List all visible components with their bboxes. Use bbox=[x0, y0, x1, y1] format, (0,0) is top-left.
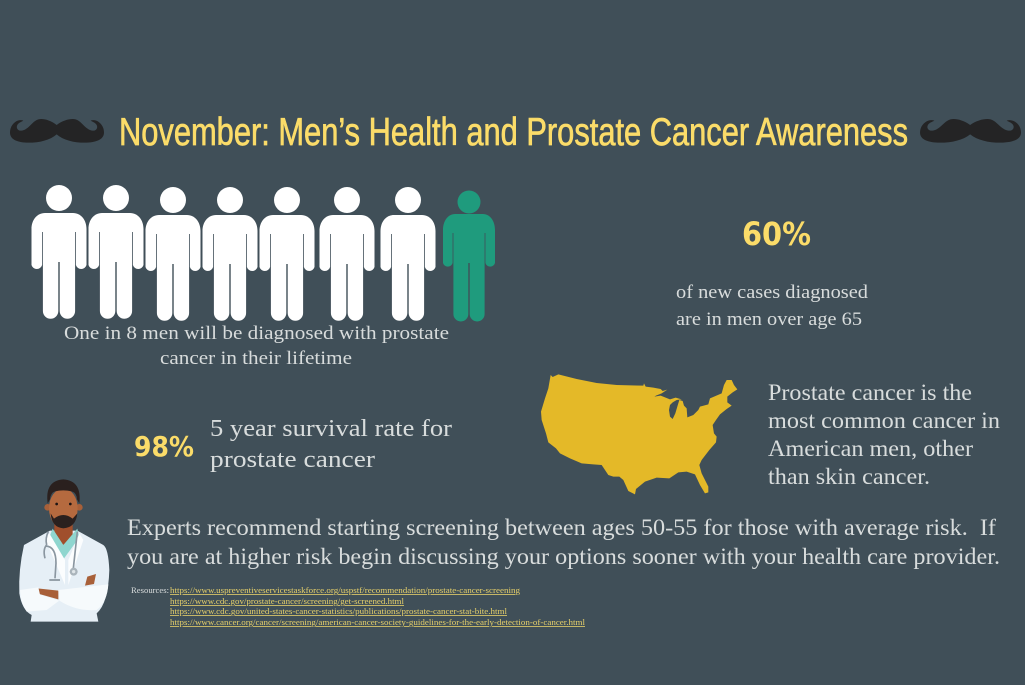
icon: USA map bbox=[541, 374, 737, 494]
text: resources: https://www.cancer.org/cancer/screening/american-cancer-society-guidelines-for-the-early-detection-of-cancer.html bbox=[170, 618, 586, 627]
text: screening recommendation: Experts recommend starting screening between ages 50-55 for those with average risk. If bbox=[127, 515, 996, 540]
text: one in eight caption bbox=[64, 323, 449, 369]
text: survival rate bbox=[210, 416, 452, 473]
text: most common cancer: American men, other bbox=[768, 436, 973, 461]
text: survival rate: 5 year survival rate for bbox=[210, 416, 452, 442]
text: new cases caption bbox=[676, 282, 869, 330]
text: most common cancer: most common cancer in bbox=[768, 408, 1001, 433]
text: one in eight caption: cancer in their lifetime bbox=[160, 348, 352, 369]
stat: 98%: 98% bbox=[134, 430, 194, 463]
text: resources: https://www.cdc.gov/united-states-cancer-statistics/publications/prostate-cancer-stat-bite.html bbox=[170, 607, 508, 616]
icon: person 1 bbox=[32, 185, 86, 319]
text: new cases caption: are in men over age 65 bbox=[676, 309, 862, 330]
icon: person 2 bbox=[88, 185, 144, 319]
icon: left moustache bbox=[10, 119, 104, 143]
icon: person 7 bbox=[380, 187, 436, 321]
stat: 60%: 60% bbox=[742, 215, 811, 253]
text: resources bbox=[131, 586, 586, 627]
text: screening recommendation: you are at higher risk begin discussing your options sooner with your health care provider. bbox=[127, 544, 1000, 569]
icon: right moustache bbox=[920, 119, 1021, 143]
text: survival rate: prostate cancer bbox=[210, 447, 375, 473]
text: resources: https://www.uspreventiveservicestaskforce.org/uspstf/recommendation/prostate-cancer-screening bbox=[170, 586, 520, 595]
icon: doctor bbox=[19, 479, 109, 622]
text: new cases caption: of new cases diagnosed bbox=[676, 282, 869, 303]
chart: one in eight men pictogram bbox=[32, 185, 495, 321]
text: most common cancer: Prostate cancer is the bbox=[768, 380, 972, 405]
text: resources: https://www.cdc.gov/prostate-cancer/screening/get-screened.html bbox=[170, 597, 405, 606]
icon: person 8 highlighted bbox=[443, 190, 495, 321]
icon: person 5 bbox=[260, 187, 314, 321]
text: screening recommendation bbox=[127, 515, 1000, 569]
text: one in eight caption: One in 8 men will be diagnosed with prostate bbox=[64, 323, 449, 344]
icon: person 3 bbox=[146, 187, 200, 321]
text: most common cancer bbox=[768, 380, 1001, 489]
icon: person 4 bbox=[202, 187, 258, 321]
icon: person 6 bbox=[320, 187, 374, 321]
text: resources: Resources: bbox=[131, 586, 169, 595]
text: most common cancer: than skin cancer. bbox=[768, 464, 930, 489]
